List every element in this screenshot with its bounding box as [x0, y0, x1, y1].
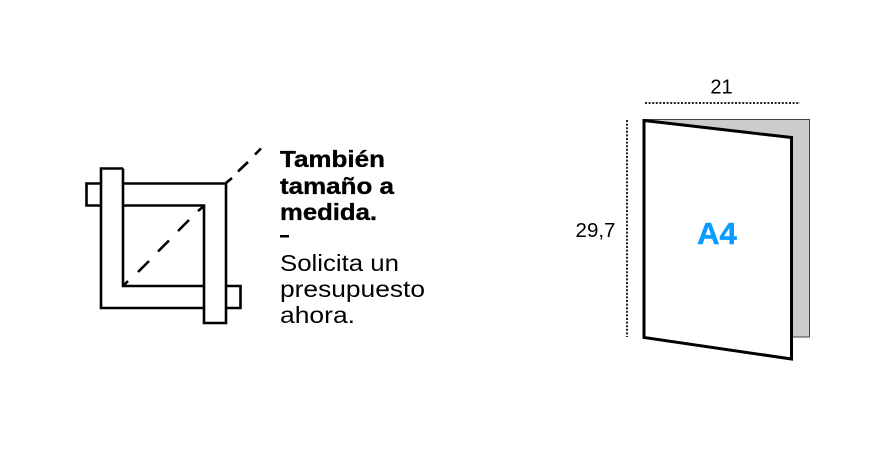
text: request a quote: presupuesto: [280, 276, 425, 302]
heading: custom size: [280, 146, 394, 225]
front page of folded sheet: [644, 120, 792, 359]
heading: custom size: tamaño a: [280, 173, 394, 199]
icon: crop tool with diagonal: [86, 148, 261, 323]
heading: custom size: medida.: [280, 199, 377, 225]
height dotted line: [626, 120, 628, 337]
text: request a quote: [280, 235, 425, 328]
heading: custom size: También: [280, 146, 385, 172]
text: request a quote: ahora.: [280, 302, 355, 328]
A4 label: A4: [697, 216, 738, 251]
width dotted line: [645, 102, 800, 104]
text: request a quote: Solicita un: [280, 250, 399, 276]
width label: 21: [710, 76, 733, 98]
back page of folded sheet: [644, 120, 810, 337]
height label: 29,7: [576, 219, 615, 242]
